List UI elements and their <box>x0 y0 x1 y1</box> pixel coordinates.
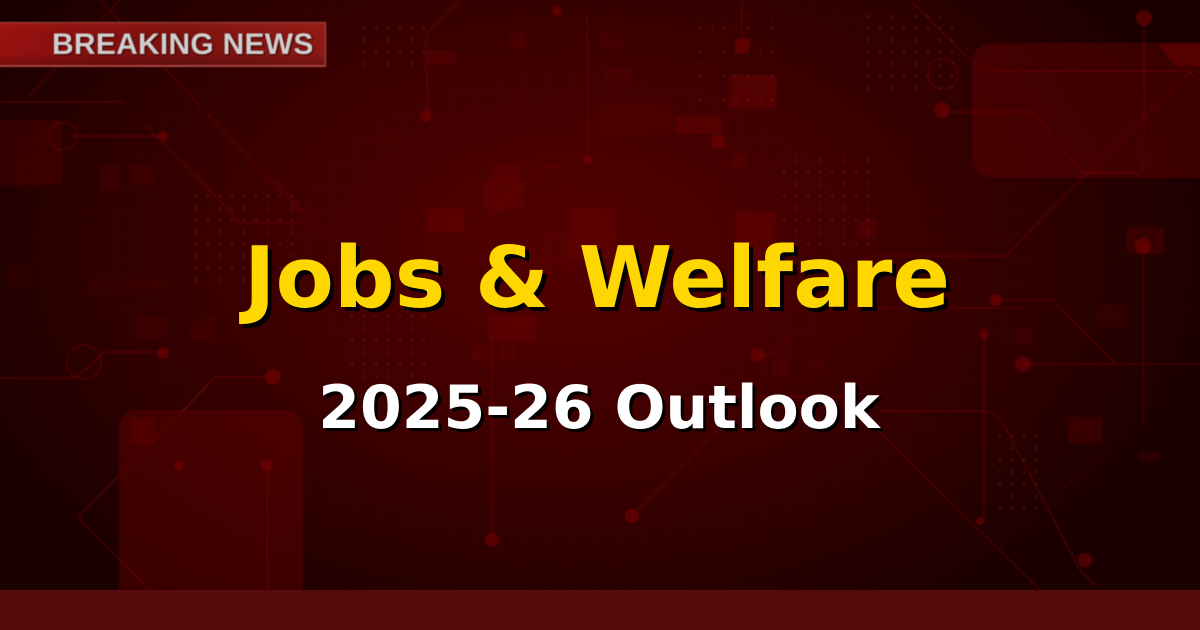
footer bar <box>0 590 1200 630</box>
banner label: BREAKING NEWS <box>52 28 314 61</box>
subtitle: 2025-26 Outlook <box>318 373 880 443</box>
breaking news banner <box>0 22 326 67</box>
title: Jobs & Welfare <box>244 229 950 328</box>
